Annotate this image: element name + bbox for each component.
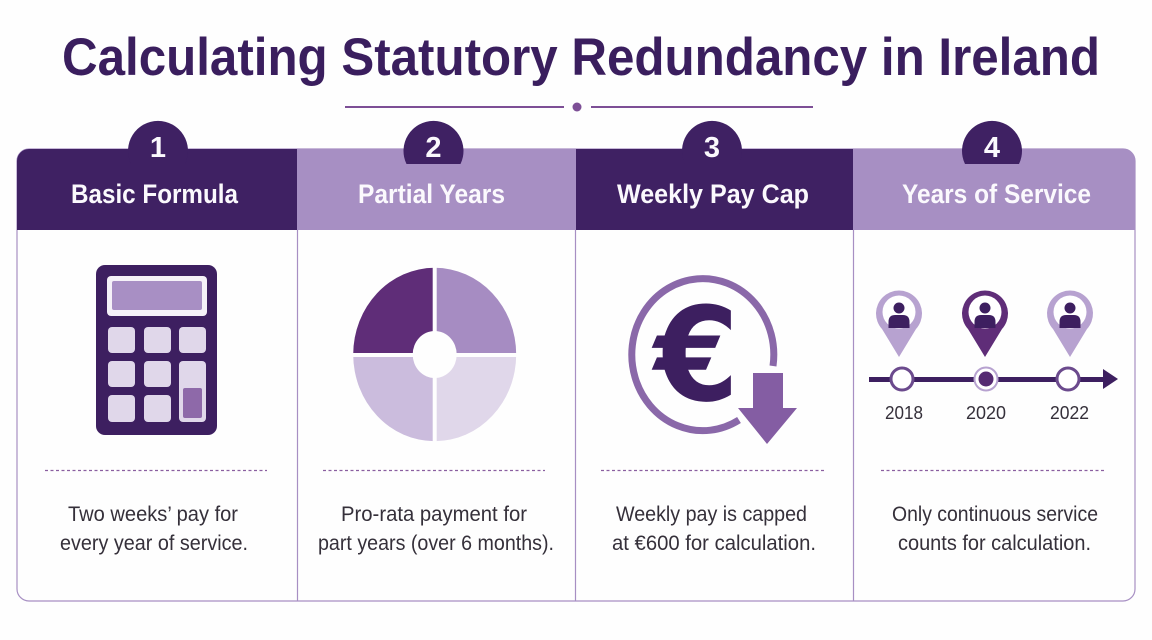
pin 2020 [962, 291, 1008, 357]
icon: timeline [869, 291, 1118, 423]
number badge 3: 3 [704, 132, 720, 164]
header: basic formula [17, 149, 297, 230]
year labels: 2018 [885, 403, 923, 423]
number badge 2: 2 [425, 132, 442, 164]
number badge 1: 1 [150, 132, 166, 164]
header: years of service: Years of Service [902, 179, 1091, 209]
icon: quartered pie [352, 266, 518, 443]
panel: basic formula [17, 121, 297, 555]
panel: partial years [298, 121, 575, 555]
description: basic formula: every year of service. [60, 532, 248, 555]
header: weekly pay cap: Weekly Pay Cap [617, 179, 809, 209]
icon: euro with down arrow [632, 279, 797, 444]
header: partial years: Partial Years [358, 179, 505, 209]
description: partial years: Pro-rata payment for [341, 503, 527, 526]
description: years of service: counts for calculation. [898, 532, 1091, 555]
number badge 4: 4 [984, 132, 1000, 164]
header: basic formula: Basic Formula [71, 179, 238, 209]
title divider [345, 102, 813, 112]
marker 2018 [891, 368, 913, 390]
icon: calculator [96, 265, 217, 435]
description: weekly pay cap: at €600 for calculation. [612, 532, 816, 555]
header: weekly pay cap [576, 149, 853, 230]
number badge 3 [682, 121, 742, 164]
pin 2022 [1047, 291, 1093, 357]
number badge 4 [962, 121, 1022, 164]
description: weekly pay cap: Weekly pay is capped [616, 503, 807, 526]
header: years of service [854, 149, 1135, 230]
icon: euro with down arrow: € [651, 279, 739, 431]
title: Calculating Statutory Redundancy in Ireland [62, 28, 1100, 87]
pin 2018 [876, 291, 922, 357]
description: partial years: part years (over 6 months). [318, 532, 554, 555]
year labels: 2022 [1050, 403, 1089, 423]
panel: weekly pay cap [576, 121, 853, 555]
header: partial years [298, 149, 575, 230]
panel: years of service [854, 121, 1135, 555]
year labels: 2020 [966, 403, 1006, 423]
description: years of service: Only continuous service [892, 503, 1098, 526]
marker 2022 [1057, 368, 1079, 390]
number badge 2 [403, 121, 463, 164]
description: basic formula: Two weeks’ pay for [68, 503, 238, 526]
marker 2020 [974, 368, 998, 390]
number badge 1 [128, 121, 188, 164]
